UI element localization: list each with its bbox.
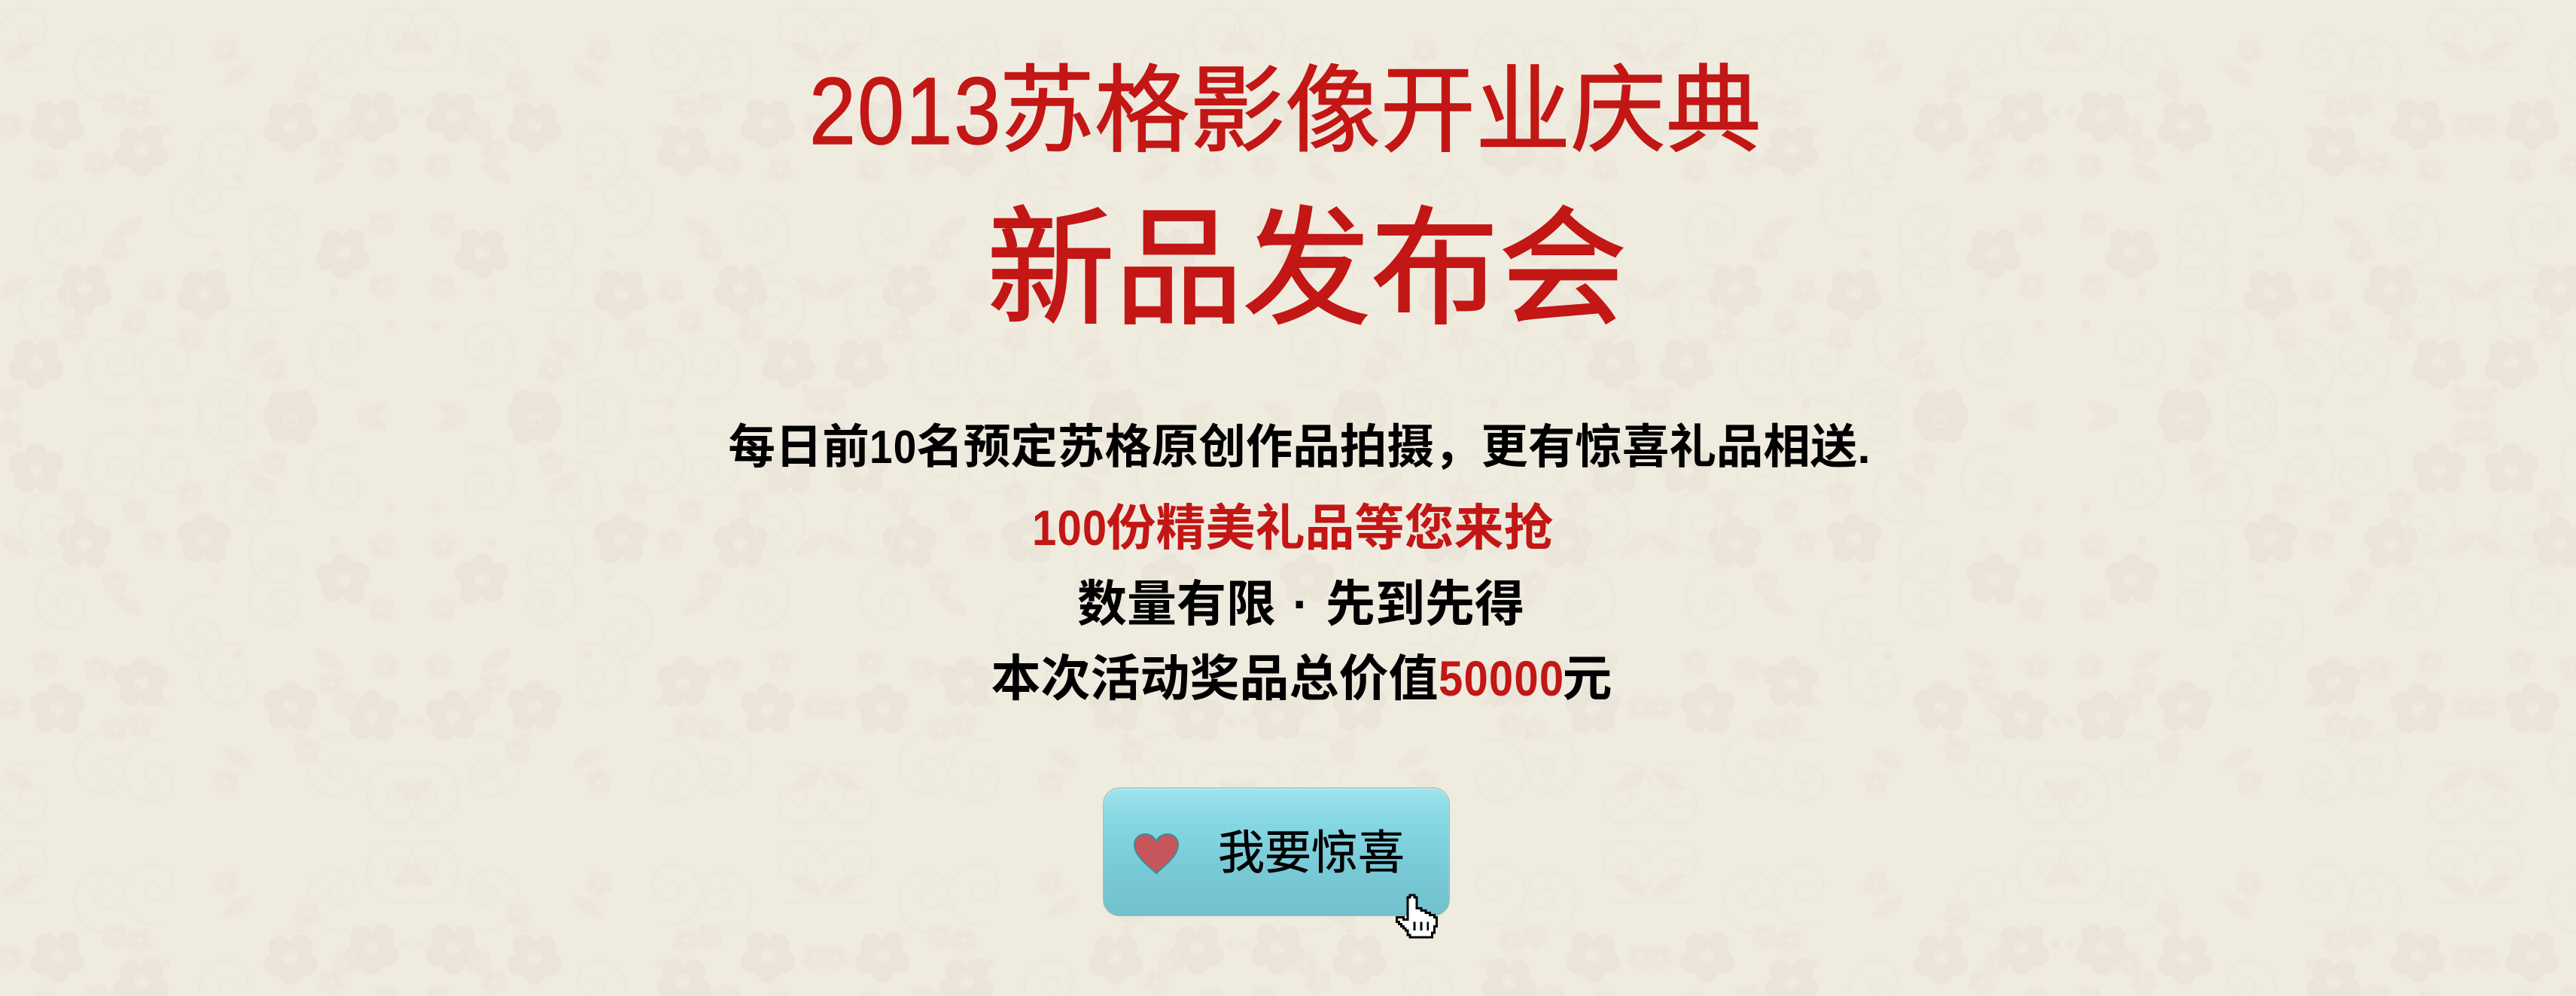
title: 2013苏格影像开业庆典: 苏格影像开业庆典 bbox=[1000, 57, 1761, 164]
button label: 我要惊喜 bbox=[1218, 827, 1405, 879]
icon: heart bbox=[1134, 833, 1179, 875]
heading: 新品发布会: 新品发布会 bbox=[987, 198, 1627, 341]
icon: hand cursor bbox=[1396, 894, 1438, 938]
text: gift line: 100 bbox=[1031, 500, 1107, 556]
text: gift line: 份精美礼品等您来抢 bbox=[1107, 500, 1554, 556]
button: 我要惊喜 bbox=[1103, 787, 1450, 916]
text: limited line: · bbox=[1293, 576, 1309, 632]
text: promo line: 10 bbox=[869, 421, 917, 474]
title: 2013苏格影像开业庆典: 2013 bbox=[808, 57, 1002, 164]
text: total value line: 50000 bbox=[1438, 650, 1564, 706]
text: total value line: 本次活动奖品总价值 元 bbox=[991, 650, 1612, 706]
text: promo line: 每日前 名预定苏格原创作品拍摄，更有惊喜礼品相送. bbox=[728, 421, 1871, 474]
text: limited line: 数量有限 先到先得 bbox=[1077, 576, 1524, 632]
